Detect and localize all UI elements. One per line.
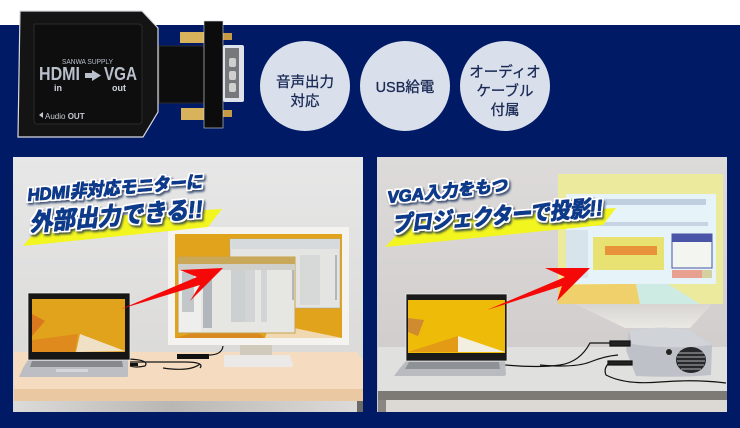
adapter printing: [39, 57, 137, 121]
connector neck and flange: [159, 46, 204, 103]
adapter printing: VGA: [104, 64, 137, 84]
adapter printing: out: [112, 83, 126, 93]
laptop: [19, 293, 130, 377]
VGA thumb screws: [180, 32, 232, 120]
callout: yellow underlined title: [23, 171, 222, 246]
feature badge: audio cable included: ケーブル: [476, 82, 534, 100]
projected image: [558, 174, 723, 304]
cables and adapter: [129, 346, 223, 369]
desk: [14, 352, 363, 412]
feature badge: audio output: 音声出力: [276, 73, 334, 91]
panel: laptop with monitor photo: [13, 157, 363, 412]
adapter printing: Audio OUT: [45, 112, 85, 121]
monitor: [168, 227, 349, 367]
adapter printing: SANWA SUPPLY: [62, 57, 113, 66]
feature badge: USB power: [360, 41, 450, 131]
projection beam: [575, 304, 712, 328]
cables and adapter: [505, 341, 726, 383]
file list rows: [182, 255, 337, 328]
feature badge: audio output: [260, 41, 350, 131]
feature badge: audio cable included: [460, 41, 550, 131]
feature badge: audio output: 対応: [290, 93, 320, 110]
VGA plug shell: [223, 45, 244, 102]
callout: yellow underlined title: 外部出力できる!!: [28, 196, 204, 237]
callout: yellow underlined title: [385, 176, 616, 247]
feature badge: audio cable included: オーディオ: [469, 63, 541, 81]
feature badge: USB power: USB給電: [376, 79, 434, 96]
adapter printing: in: [54, 83, 62, 93]
product: HDMI to VGA adapter: [18, 11, 244, 137]
projector: [626, 328, 712, 377]
arrow: red laptop to projection: [487, 268, 590, 310]
callout: yellow underlined title: VGA入力をもつ: [387, 176, 509, 207]
panel: laptop with projector photo: [377, 157, 727, 412]
callout: yellow underlined title: プロジェクターで投影!!: [390, 195, 604, 237]
feature badge: audio cable included: 付属: [490, 102, 520, 119]
callout: yellow underlined title: HDMI非対応モニターに: [27, 171, 204, 205]
desk: [378, 347, 727, 412]
laptop: [394, 294, 507, 376]
adapter printing: HDMI: [39, 64, 80, 84]
arrow: red laptop to monitor: [121, 268, 223, 309]
adapter body: [18, 11, 158, 137]
